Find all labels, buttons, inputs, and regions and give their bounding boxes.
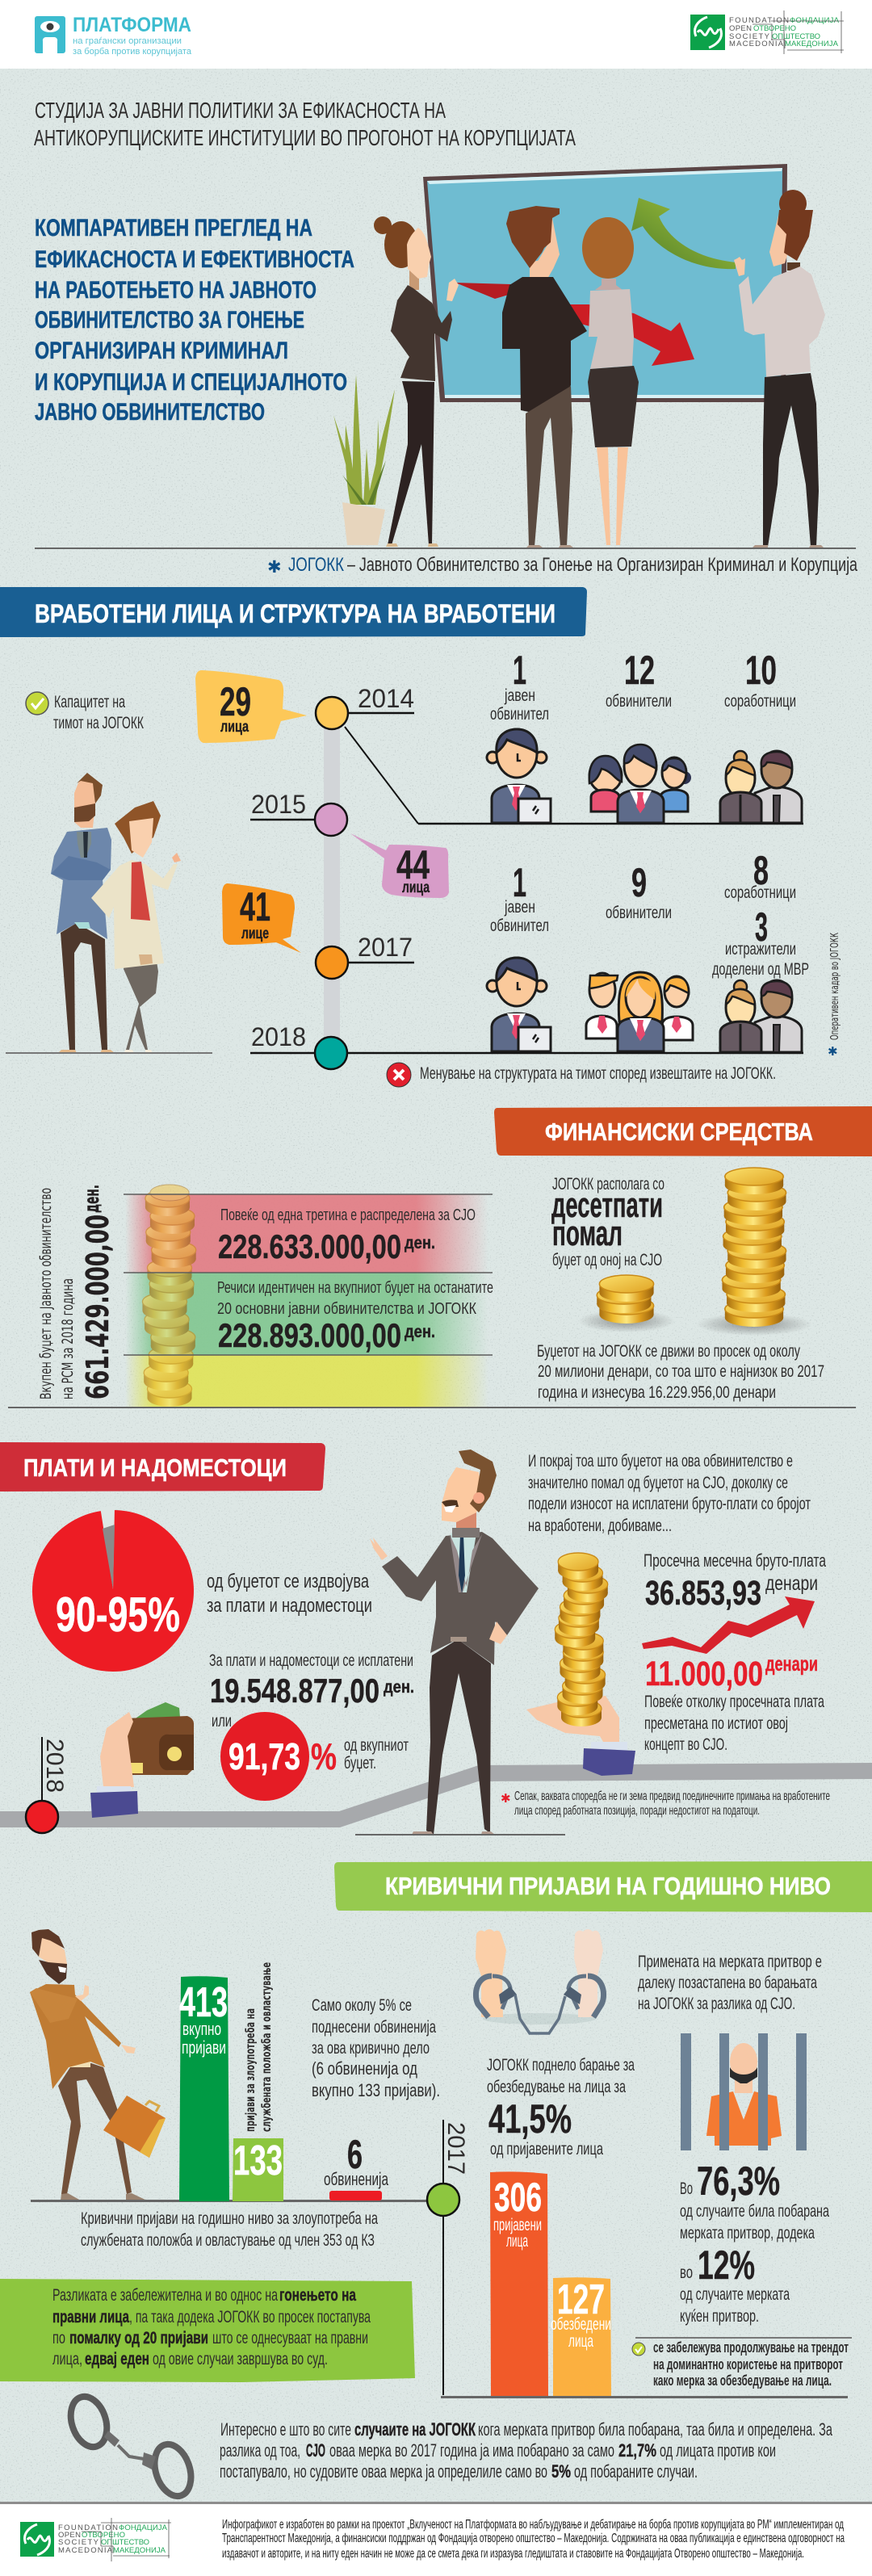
salaries paid: 19.548.877,00 <box>210 1672 379 1710</box>
icon: hands in handcuffs <box>476 1929 604 2033</box>
counts 2014: обвинители <box>606 692 672 711</box>
icon: three prosecutors 2018 <box>586 972 693 1051</box>
main heading: ОБВИНИТЕЛСТВО ЗА ГОНЕЊЕ <box>35 307 304 334</box>
callout: legal entities: едвај еден <box>85 2350 149 2368</box>
footer <box>0 2502 872 2576</box>
woman in coat <box>91 801 181 1053</box>
total budget, vertical: на РСМ за 2018 година <box>59 1278 77 1399</box>
counts 2014: соработници <box>724 692 796 711</box>
interesting note: 5% <box>551 2461 571 2482</box>
timeline 2017: 2017 <box>442 2122 469 2175</box>
green arrow <box>631 198 736 269</box>
man ground <box>355 1834 565 1836</box>
bar: 127 persons <box>551 2276 611 2396</box>
5% note: за ова кривично дело <box>312 2039 430 2058</box>
counts 2017: истражители <box>725 940 796 959</box>
SJO share <box>218 1206 476 1265</box>
node 2017 <box>316 946 348 979</box>
logo: Foundation Open Society Macedonia <box>690 10 844 54</box>
salaries paid: или <box>212 1712 232 1731</box>
red rising arrow <box>642 1596 815 1654</box>
logo: Foundation Open Society Macedonia: МАКЕДОНИЈА <box>785 40 839 48</box>
legend: JOGOKK abbreviation: ✱ <box>267 558 282 577</box>
band rules <box>124 1194 493 1355</box>
bar: 127 persons: обезбедени <box>551 2315 611 2334</box>
callout: legal entities <box>0 2279 415 2382</box>
salaries paid: ден. <box>384 1678 414 1697</box>
bar: 306 persons: лица <box>506 2232 528 2251</box>
bubble: 29: 29 <box>220 679 251 724</box>
icon: hand with wallet <box>90 1702 194 1818</box>
ten times smaller: ЈОГОКК располага со <box>552 1175 664 1194</box>
bar: 413 reports: пријави <box>182 2037 226 2058</box>
ten times smaller: помал <box>552 1214 623 1253</box>
interesting note <box>220 2419 833 2482</box>
bubble: 41: лице <box>241 925 269 942</box>
footnote: ✱ <box>501 1792 511 1806</box>
other prosecutors share <box>217 1279 493 1354</box>
pie caption <box>207 1571 372 1617</box>
footer credits <box>222 2518 845 2561</box>
heading banner: ВРАБОТЕНИ ЛИЦА И СТРУКТУРА НА ВРАБОТЕНИ <box>35 599 555 628</box>
main heading: КОМПАРАТИВЕН ПРЕГЛЕД НА <box>35 215 312 241</box>
timeline: 2015 <box>251 790 306 819</box>
budget bands <box>125 1194 488 1408</box>
interesting note: случаите на ЈОГОКК <box>354 2419 476 2440</box>
section: criminal reports <box>0 1861 872 2501</box>
main heading: И КОРУПЦИЈА И СПЕЦИЈАЛНОТО <box>35 369 347 396</box>
main heading: ЈАВНО ОБВИНИТЕЛСТВО <box>35 399 265 426</box>
total budget, vertical: 661.429.000,00 <box>80 1215 115 1399</box>
interesting note: СЈО <box>306 2440 325 2461</box>
callout: legal entities: што се однесуваат на правни <box>212 2329 368 2347</box>
bar: 6 indictments: обвиненија <box>324 2169 389 2189</box>
76.3% and 12%: во <box>680 2263 693 2282</box>
salary difference: концепт во СЈО. <box>644 1735 727 1754</box>
counts 2017: обвинител <box>490 917 549 935</box>
timeline: 2018 <box>251 1022 306 1051</box>
coin stack <box>142 1185 196 1407</box>
76.3% and 12%: 12% <box>698 2242 755 2288</box>
icon: two associates 2014 <box>720 751 802 823</box>
bubble: 41 <box>222 883 301 953</box>
other prosecutors share: 228.893.000,00 <box>218 1316 401 1354</box>
91.73% circle: 91,73 <box>228 1735 300 1777</box>
interesting note: од побараните случаи. <box>574 2461 698 2482</box>
5% note: вкупно 133 пријави). <box>312 2080 440 2100</box>
other prosecutors share: 20 основни јавни обвинителства и ЈОГОКК <box>217 1300 476 1318</box>
logo: Foundation Open Society Macedonia: ОТВОРЕНО <box>753 24 796 33</box>
baseline <box>8 1407 856 1408</box>
callout: legal entities: по <box>52 2329 65 2347</box>
capacity note <box>26 692 144 732</box>
board <box>423 164 787 402</box>
bubble: 44 <box>350 833 449 898</box>
bubble: 29: лица <box>220 719 249 736</box>
callout: legal entities: од овие случаи завршува во суд. <box>153 2350 328 2368</box>
bar: 306 persons: пријавени <box>493 2216 542 2234</box>
footer logo: SOCIETY <box>58 2538 99 2547</box>
coin stack on palm <box>526 1553 635 1776</box>
76.3% and 12%: од случаите мерката <box>680 2285 790 2304</box>
counts 2014: 1 <box>513 648 526 693</box>
footer logo: OPEN <box>58 2531 81 2540</box>
main heading: ЕФИКАСНОСТА И ЕФЕКТИВНОСТА <box>35 246 354 273</box>
interesting note: разлика од тоа, <box>220 2440 300 2461</box>
vertical note: Оперативен кадар во ЈОГОКК <box>828 933 841 1040</box>
counts 2017: јавен <box>504 898 535 917</box>
section: salaries <box>0 1442 872 1836</box>
logo: Foundation Open Society Macedonia: SOCIETY <box>729 32 770 41</box>
bar: 127 persons: 127 <box>557 2276 605 2323</box>
legend: JOGOKK abbreviation: ЈОГОКК <box>288 554 344 576</box>
vertical bar label: пријави за злоупотреба на <box>243 2008 258 2132</box>
other prosecutors share: ден. <box>405 1323 435 1341</box>
callout: legal entities: лица, <box>52 2350 82 2368</box>
41.5% <box>487 2056 635 2159</box>
5% note <box>312 1996 440 2100</box>
counts 2017: доделени од МВР <box>712 960 809 979</box>
callout: legal entities: гонењето на <box>279 2286 356 2305</box>
pie caption: од буџетот се издвојува <box>207 1571 369 1592</box>
91.73% circle <box>220 1712 409 1801</box>
heading banner <box>334 1861 872 1912</box>
vertical bar label <box>243 1962 274 2132</box>
41.5%: 41,5% <box>488 2096 572 2142</box>
total budget, vertical <box>37 1185 115 1399</box>
interesting note: постапувало, но судовите оваа мерка ја определиле само во <box>220 2461 547 2482</box>
footer logo: МАКЕДОНИЈА <box>113 2546 166 2555</box>
main heading <box>35 215 354 426</box>
header band <box>0 0 872 69</box>
man in white shirt <box>734 190 825 548</box>
speaking man <box>370 1450 539 1835</box>
woman in skirt <box>582 217 639 545</box>
pie caption: за плати и надоместоци <box>207 1595 372 1617</box>
SJO share: 228.633.000,00 <box>218 1227 401 1265</box>
SJO share: Повеќе од една третина е распределена за СЈО <box>220 1206 476 1224</box>
icon: prosecutor 2018 <box>487 958 551 1051</box>
interesting note: од лицата против кои <box>660 2440 776 2461</box>
intro text: на вработени, добиваме... <box>528 1517 672 1535</box>
5% note: (6 обвиненија од <box>312 2058 417 2079</box>
average budget note: година и изнесува 16.229.956,00 денари <box>538 1383 776 1402</box>
counts 2014: јавен <box>504 686 535 705</box>
baseline <box>31 2200 426 2202</box>
heading banner <box>0 1442 325 1491</box>
callout: legal entities: Разликата е забележителна и во однос на <box>52 2286 278 2305</box>
91.73% circle: од вкупниот <box>344 1736 409 1755</box>
bar: 413 reports <box>179 1976 229 2201</box>
character ground <box>6 1052 212 1054</box>
study title <box>34 98 576 150</box>
bar: 133 reports <box>233 2138 283 2201</box>
footer logo: ФОНДАЦИЈА <box>119 2524 168 2532</box>
timeline <box>250 684 803 1069</box>
node 2018 <box>315 1037 347 1069</box>
salary difference: пресметана по истиот овој <box>644 1714 788 1733</box>
ten times smaller: буџет од оној на СЈО <box>552 1251 662 1269</box>
average salary: 36.853,93 <box>645 1574 761 1613</box>
chart caption: Кривични пријави на годишно ниво за злоупотреба на <box>81 2209 378 2228</box>
counts 2017: обвинители <box>606 904 672 922</box>
logo: Platforma: за борба против корупцијата <box>73 47 192 57</box>
heading banner: ФИНАНСИСКИ СРЕДСТВА <box>545 1118 813 1146</box>
average salary <box>644 1550 827 1613</box>
counts 2017: 3 <box>755 904 768 950</box>
average budget note <box>537 1342 824 1402</box>
coins: comparison <box>578 1168 812 1336</box>
91.73% circle: % <box>311 1735 337 1777</box>
detention note <box>638 1953 822 2013</box>
pie chart 90-95%: 90-95% <box>56 1588 180 1642</box>
timeline: 2017 <box>358 933 413 962</box>
salary difference <box>644 1653 824 1754</box>
bar: 133 reports: 133 <box>233 2138 283 2184</box>
footer logo: FOUNDATION <box>58 2524 118 2532</box>
total budget, vertical: Вкупен буџет на Јавното обвинителство <box>37 1188 55 1399</box>
logo: Foundation Open Society Macedonia: ФОНДАЦИЈА <box>790 16 840 25</box>
bar: 413 reports: вкупно <box>182 2019 221 2039</box>
footer logo: ОТВОРЕНО <box>82 2531 125 2540</box>
logo: Platforma <box>35 14 192 57</box>
icon: three prosecutors 2014 <box>589 745 691 823</box>
bubble: 29 <box>195 670 307 743</box>
bubble: 44: 44 <box>396 842 430 887</box>
bearded man <box>30 1929 147 2201</box>
41.5%: од пријавените лица <box>490 2140 603 2159</box>
bar: 306 persons: 306 <box>494 2175 542 2220</box>
salary difference: денари <box>765 1653 818 1676</box>
counts 2017 <box>490 848 809 979</box>
vertical note: ✱ <box>828 1045 838 1059</box>
salary difference: 11.000,00 <box>645 1655 763 1693</box>
bar: 6 indictments <box>324 2132 389 2201</box>
bubble: 41: 41 <box>240 884 270 929</box>
footnote <box>501 1789 830 1818</box>
5% note: Само околу 5% се <box>312 1996 412 2015</box>
76.3% and 12% <box>680 2159 829 2326</box>
91.73% circle: буџет. <box>344 1754 376 1773</box>
counts 2014 <box>490 648 796 724</box>
counts 2014: обвинител <box>490 705 549 724</box>
other prosecutors share: Речиси идентичен на вкупниот буџет на останатите <box>217 1279 493 1297</box>
counts 2017: соработници <box>724 883 796 902</box>
76.3% and 12%: 76,3% <box>697 2159 780 2204</box>
node 2015 <box>315 803 347 836</box>
timeline 2018 <box>26 1737 68 1833</box>
section: finances <box>8 1106 872 1408</box>
ground line <box>35 548 856 549</box>
76.3% and 12%: Во <box>680 2180 693 2198</box>
main heading: ОРГАНИЗИРАН КРИМИНАЛ <box>35 338 288 364</box>
total budget, vertical: ден. <box>80 1185 103 1213</box>
76.3% and 12%: куќен притвор. <box>680 2307 759 2326</box>
salaries paid: За плати и надоместоци се исплатени <box>209 1651 413 1670</box>
vertical note <box>828 933 841 1059</box>
bar: 6 indictments: 6 <box>347 2132 363 2177</box>
briefcase <box>103 2096 166 2158</box>
man with crossed arms <box>51 773 115 1053</box>
logo: Foundation Open Society Macedonia: MACEDONIA <box>729 40 784 48</box>
logo: Foundation Open Society Macedonia: ОПШТЕСТВО <box>772 32 820 41</box>
average salary: денари <box>765 1572 818 1595</box>
76.3% and 12%: мерката притвор, додека <box>680 2224 815 2242</box>
illustration: team at the board <box>333 164 825 548</box>
study title: АНТИКОРУПЦИСКИТЕ ИНСТИТУЦИИ ВО ПРОГОНОТ НА КОРУПЦИЈАТА <box>34 125 576 150</box>
logo: Platforma: ПЛАТФОРМА <box>73 14 191 36</box>
ten times smaller <box>551 1175 664 1269</box>
red arrow <box>455 283 694 366</box>
callout: legal entities: помалку од 20 пријави <box>69 2329 208 2347</box>
interesting note: оваа мерка во 2017 година ја има побарано за само <box>329 2440 614 2461</box>
chart caption <box>81 2209 378 2250</box>
41.5%: обезбедување на лица за <box>487 2078 626 2096</box>
callout: legal entities: правни лица <box>52 2308 129 2326</box>
footer logo: MACEDONIA <box>58 2546 113 2555</box>
counts 2017: 1 <box>513 860 526 905</box>
chart caption: службената положба и овластување од член 353 од КЗ <box>81 2231 375 2250</box>
salaries paid <box>209 1651 414 1731</box>
ten times smaller: десетпати <box>551 1185 663 1225</box>
grey road <box>0 1763 872 1827</box>
interesting note: 21,7% <box>618 2440 656 2461</box>
counts 2014: 12 <box>624 648 655 693</box>
interesting note: Интересно е што во сите <box>220 2419 351 2440</box>
bar: 306 persons <box>490 2171 548 2396</box>
footer logo <box>20 2518 171 2561</box>
woman on the left <box>374 216 459 547</box>
counts 2017: 8 <box>753 848 769 893</box>
icon: prosecutor 2014 <box>487 729 551 823</box>
bar: 127 persons: лица <box>568 2332 593 2351</box>
vertical bar label: службената положба и овластување <box>259 1962 274 2132</box>
counts 2014: 10 <box>745 648 777 693</box>
capacity note: Капацитет на <box>54 693 125 711</box>
icon: two associates 2018 <box>720 980 802 1052</box>
callout: legal entities: , па така додека ЈОГОКК во просек постапува <box>129 2308 371 2326</box>
main heading: НА РАБОТЕЊЕТО НА ЈАВНОТО <box>35 277 317 304</box>
capacity note: тимот на ЈОГОКК <box>53 714 144 732</box>
two characters <box>51 773 181 1053</box>
note: structure change <box>387 1063 776 1087</box>
logo: Platforma: на граѓански организации <box>73 36 182 46</box>
bubble: 44: лица <box>402 879 430 896</box>
trend note <box>632 2339 849 2389</box>
node 2014 <box>316 697 348 729</box>
timeline 2017 <box>427 2120 469 2395</box>
baseline <box>441 2396 848 2398</box>
bar: 413 reports: 413 <box>179 1979 228 2026</box>
footer logo: ОПШТЕСТВО <box>101 2538 149 2547</box>
pie chart 90-95% <box>32 1507 194 1672</box>
timeline 2018: 2018 <box>41 1739 68 1793</box>
41.5%: ЈОГОКК поднело барање за <box>487 2056 635 2075</box>
SJO share: ден. <box>405 1234 435 1252</box>
logo: Foundation Open Society Macedonia: FOUNDATION <box>729 16 789 25</box>
study title: СТУДИЈА ЗА ЈАВНИ ПОЛИТИКИ ЗА ЕФИКАСНОСТА НА <box>35 98 446 123</box>
plant <box>333 375 395 545</box>
5% note: поднесени обвиненија <box>312 2018 436 2037</box>
icon: prisoner <box>681 2033 807 2150</box>
heading banner: ПЛАТИ И НАДОМЕСТОЦИ <box>23 1454 287 1482</box>
heading banner <box>0 587 587 637</box>
section: employees <box>0 587 841 1087</box>
intro text <box>528 1452 811 1535</box>
heading banner <box>494 1106 872 1156</box>
counts 2017: 9 <box>631 860 647 905</box>
separator rule <box>635 2337 852 2339</box>
man in dark jacket <box>502 206 587 548</box>
timeline: 2014 <box>358 684 414 713</box>
logo: Foundation Open Society Macedonia: OPEN <box>729 24 752 33</box>
icon: handcuffs <box>65 2392 197 2501</box>
